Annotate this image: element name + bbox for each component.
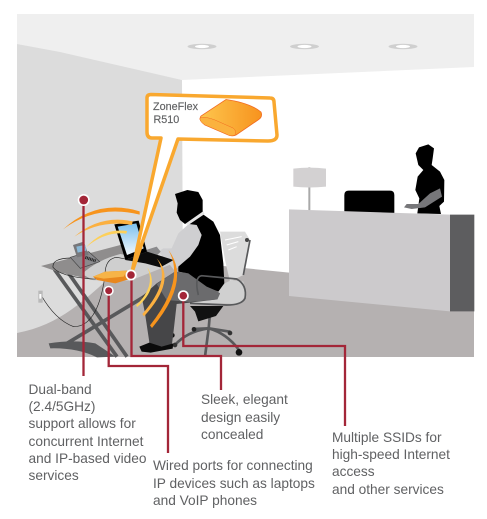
text: sleek design: design easily — [201, 410, 280, 425]
desk top — [41, 245, 174, 280]
product name: ZoneFlex — [153, 101, 199, 113]
wireless signal arcs, upper — [63, 207, 140, 247]
reception area — [289, 144, 474, 311]
worker in chair — [139, 190, 250, 357]
cables — [53, 257, 130, 279]
callout: ZoneFlex R510 — [132, 94, 277, 272]
text: multiple SSIDs: Multiple SSIDs for — [332, 430, 442, 445]
text: dual-band: support allows for — [28, 416, 136, 431]
monitor — [344, 191, 394, 213]
ceiling lights — [188, 44, 418, 49]
router on desk — [93, 271, 129, 283]
hand — [143, 247, 161, 258]
leader line: dual-band — [78, 194, 90, 376]
shoe — [139, 343, 173, 353]
phone — [70, 242, 100, 268]
desk foot — [49, 341, 115, 357]
chair arm — [190, 276, 245, 305]
laptop — [114, 221, 174, 267]
desk and equipment — [38, 242, 174, 357]
text: sleek design: concealed — [201, 427, 263, 442]
leader line: multiple SSIDs — [178, 290, 345, 426]
leader line: sleek design — [126, 270, 221, 390]
reception desk — [289, 209, 450, 311]
desk legs — [54, 269, 147, 357]
text: dual-band: Dual-band — [28, 382, 92, 397]
laptop, router and signal arcs — [63, 207, 174, 283]
text: multiple SSIDs: and other services — [332, 482, 444, 497]
text: dual-band: concurrent Internet — [28, 434, 144, 449]
text: multiple SSIDs: high-speed Internet — [332, 447, 450, 462]
text: wired ports: Wired ports for connecting — [153, 458, 313, 473]
head — [175, 190, 203, 224]
chair base — [175, 313, 239, 357]
vest — [178, 213, 224, 292]
floor — [17, 250, 474, 357]
text: sleek design: Sleek, elegant — [201, 392, 288, 407]
text: multiple SSIDs: access — [332, 464, 375, 479]
text: dual-band: (2.4/5GHz) — [28, 399, 95, 414]
left wall — [17, 44, 183, 340]
collar — [183, 211, 205, 225]
receptionist arm — [404, 188, 442, 209]
wall outlet — [38, 291, 43, 303]
upper thigh — [157, 272, 220, 302]
shirt and arm — [158, 224, 202, 270]
text: dual-band: and IP-based video — [28, 451, 147, 466]
lamp — [293, 167, 326, 211]
callout: ZoneFlex R510: R510 — [154, 114, 179, 126]
ceiling — [17, 14, 474, 80]
chair back — [220, 232, 250, 282]
room background — [17, 14, 474, 357]
text: dual-band: services — [28, 468, 79, 483]
text: wired ports: and VoIP phones — [153, 493, 257, 508]
leader line: wired ports — [104, 286, 168, 453]
receptionist — [415, 144, 444, 214]
chair seat — [190, 280, 246, 304]
wireless signal arcs, lower — [136, 250, 177, 328]
icon: router — [200, 100, 262, 136]
chair stem — [190, 306, 223, 321]
trouser legs — [142, 272, 220, 347]
text: wired ports: IP devices such as laptops — [153, 476, 315, 491]
desk side — [450, 215, 474, 311]
